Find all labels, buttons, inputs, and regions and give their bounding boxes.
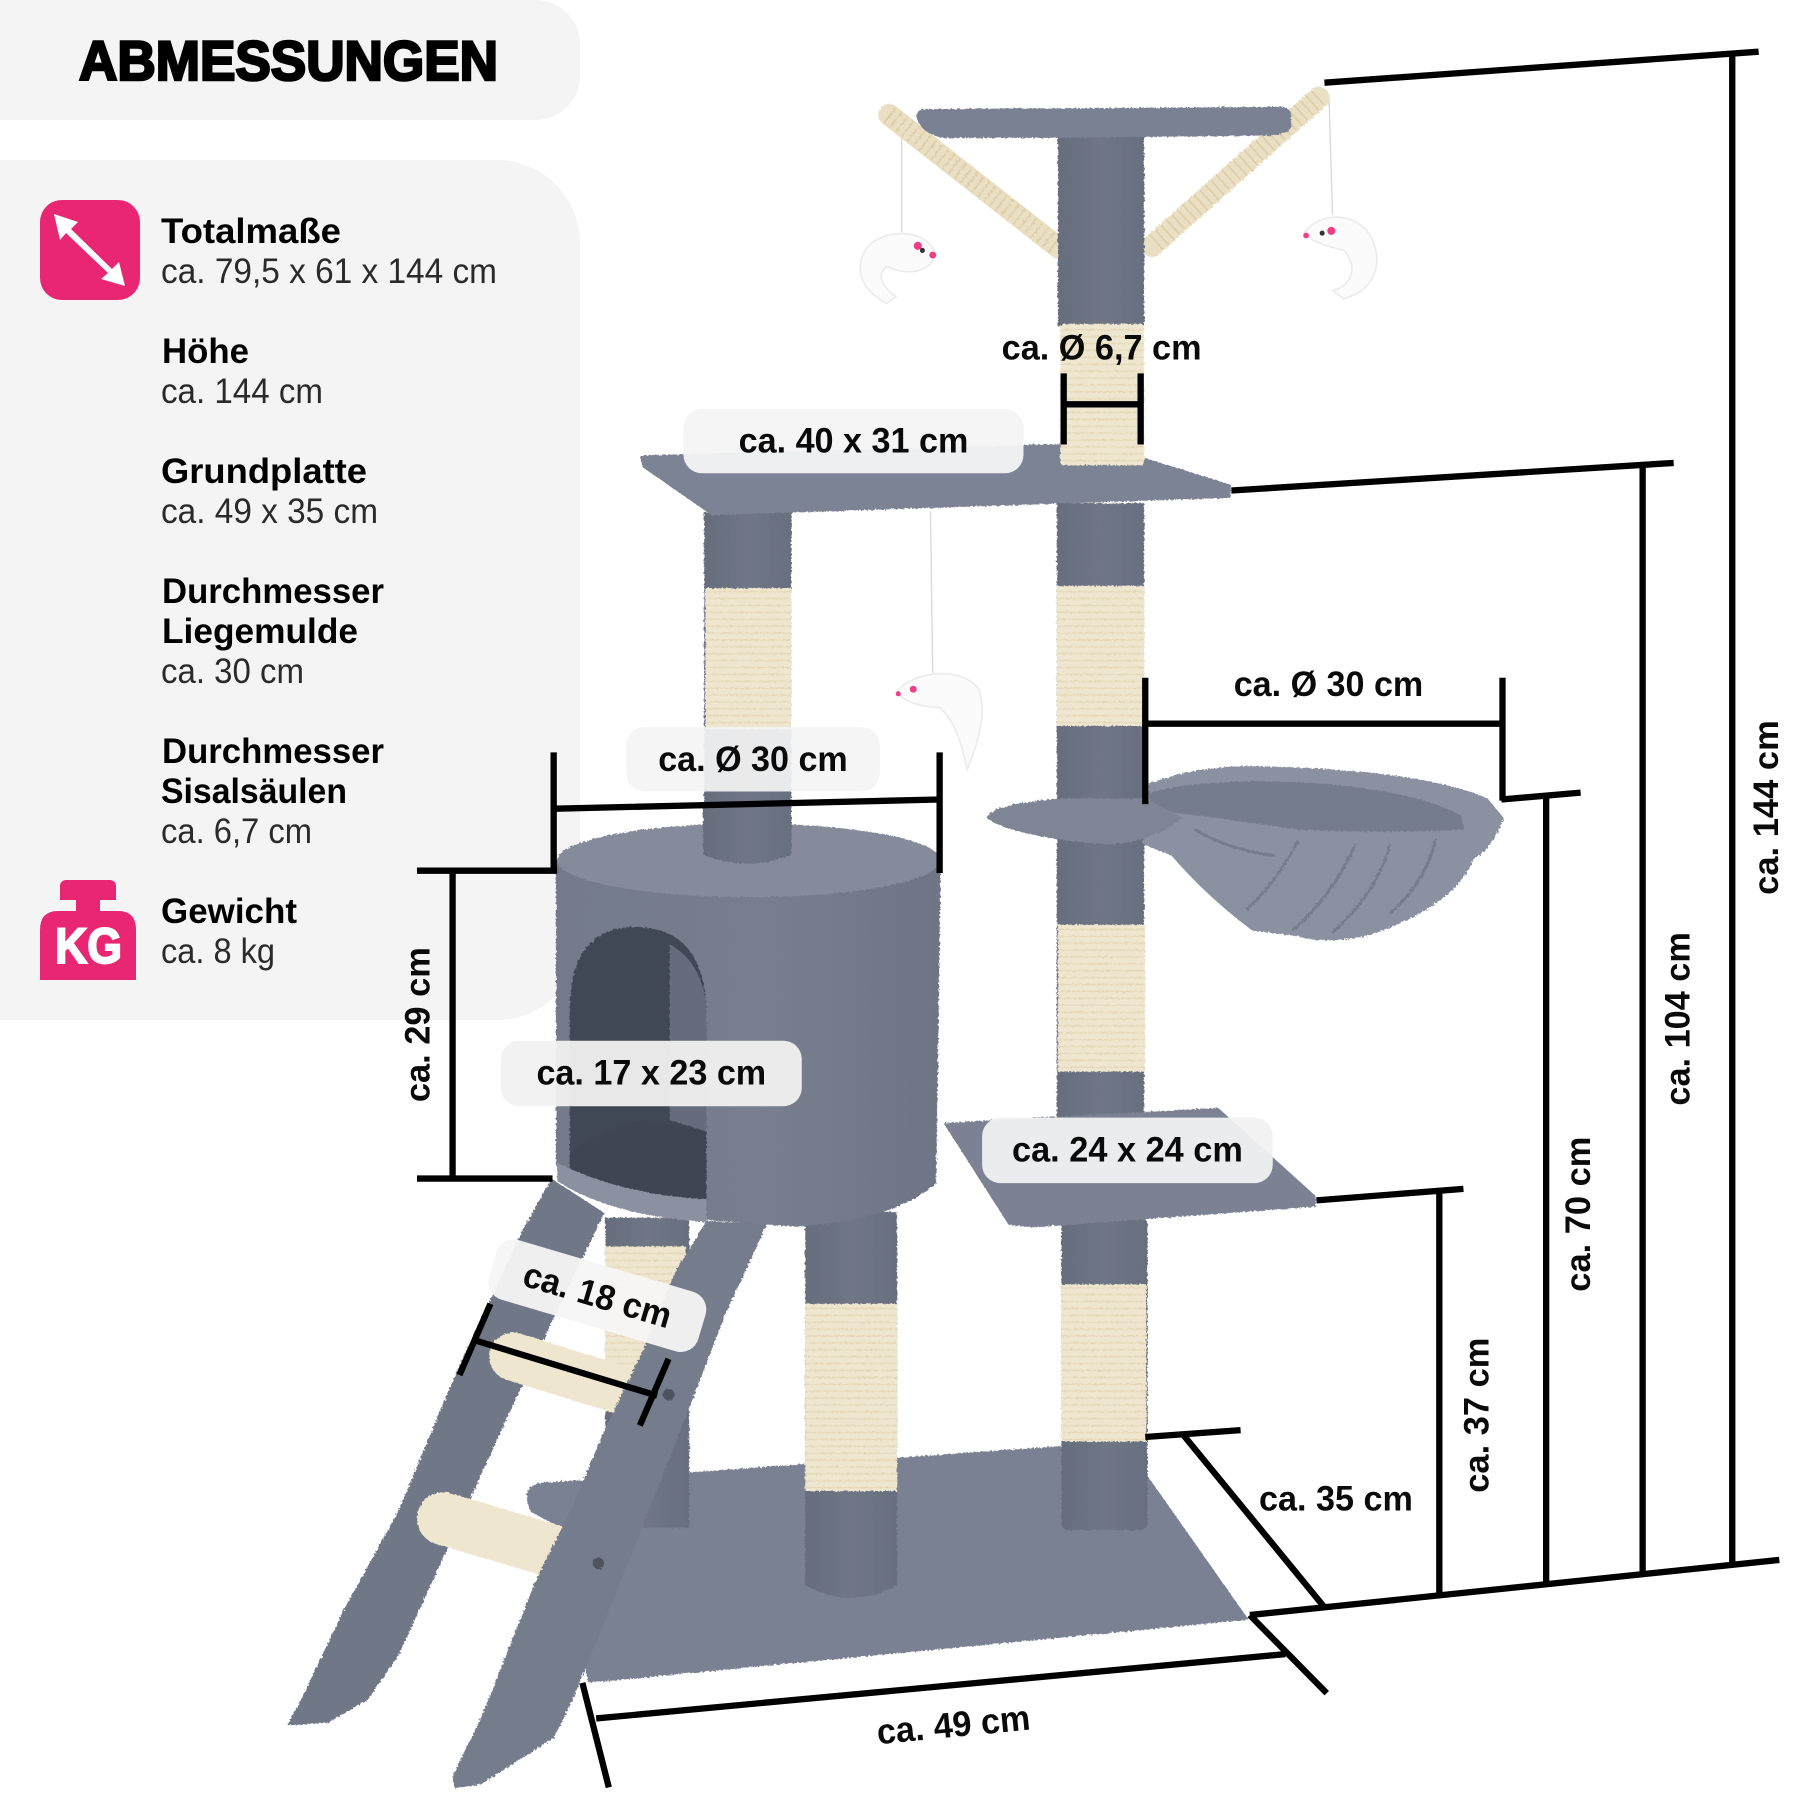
dimension: post diameter: ca. Ø 6,7 cm xyxy=(1002,328,1202,368)
label: house opening: ca. 17 x 23 cm xyxy=(536,1052,766,1092)
dimension: 70 cm: ca. 70 cm xyxy=(1558,1137,1598,1292)
spec: height: ca. 144 cm xyxy=(161,372,323,411)
ladder rear rail xyxy=(287,1179,604,1725)
dimension: house diameter: ca. Ø 30 cm xyxy=(658,739,848,779)
dimension: ladder width: ca. 18 cm xyxy=(519,1254,676,1336)
dimension: 70 cm xyxy=(1501,793,1598,1583)
icon: weight: KG xyxy=(55,918,122,974)
spec: hollow diameter xyxy=(161,572,384,691)
spec: weight: ca. 8 kg xyxy=(161,932,275,971)
toy mice xyxy=(860,217,1377,770)
hammock xyxy=(987,766,1504,940)
dimensions and labels xyxy=(398,52,1786,1787)
spec: total size: ca. 79,5 x 61 x 144 cm xyxy=(161,252,497,291)
spec: total size xyxy=(161,212,497,291)
arms xyxy=(889,98,1319,248)
lower platform xyxy=(947,1110,1314,1226)
dimension: hammock diameter xyxy=(1145,664,1502,804)
toy strings xyxy=(902,98,1332,673)
dimension: 104 cm: ca. 104 cm xyxy=(1658,932,1698,1106)
top platform xyxy=(917,107,1291,138)
spec: weight: Gewicht xyxy=(161,892,297,931)
dimension: house height xyxy=(398,871,557,1179)
dimension: house height: ca. 29 cm xyxy=(398,947,438,1102)
label: lower platform: ca. 24 x 24 cm xyxy=(1012,1129,1243,1169)
label: middle platform: ca. 40 x 31 cm xyxy=(739,421,968,461)
dimension: base width xyxy=(582,1615,1327,1787)
spec: sisal post diameter: Sisalsäulen xyxy=(161,772,347,811)
spec: sisal post diameter: Durchmesser xyxy=(162,732,384,771)
label: lower platform xyxy=(982,1118,1273,1183)
ladder rungs xyxy=(443,1357,620,1551)
dimension: total height xyxy=(1250,52,1786,1615)
dimension: ladder width xyxy=(459,1235,711,1426)
spec: hollow diameter: ca. 30 cm xyxy=(161,652,304,691)
front post xyxy=(805,1212,897,1598)
dimension: house diameter xyxy=(554,727,940,873)
panel: title xyxy=(0,0,580,120)
spec: height: Höhe xyxy=(162,332,249,371)
main post xyxy=(1057,503,1145,1123)
middle platform xyxy=(642,391,1229,513)
top post xyxy=(1058,136,1144,465)
spec: hollow diameter: Durchmesser xyxy=(162,572,384,611)
panel: specifications xyxy=(0,160,580,1020)
spec: sisal post diameter xyxy=(161,732,384,851)
ladder front rail xyxy=(453,1221,767,1789)
spec: base plate xyxy=(161,452,378,531)
dimension: 37 cm xyxy=(1316,1189,1497,1594)
label: middle platform xyxy=(683,409,1023,473)
base plate xyxy=(527,1442,1249,1683)
dimension: post diameter xyxy=(1002,328,1202,445)
dimension: base depth: ca. 35 cm xyxy=(1259,1479,1413,1519)
label: house opening xyxy=(501,1041,802,1106)
dimension: total height: ca. 144 cm xyxy=(1746,720,1786,895)
spec: hollow diameter: Liegemulde xyxy=(162,612,358,651)
icon: weight xyxy=(40,880,136,980)
spec: weight xyxy=(161,892,297,971)
spec: height xyxy=(161,332,323,411)
dimension: base width: ca. 49 cm xyxy=(875,1698,1032,1752)
spec: base plate: ca. 49 x 35 cm xyxy=(161,492,378,531)
screws xyxy=(593,1389,674,1569)
spec: base plate: Grundplatte xyxy=(161,452,367,491)
house xyxy=(556,804,941,1227)
dimension: 104 cm xyxy=(1231,463,1698,1574)
dimension: 37 cm: ca. 37 cm xyxy=(1457,1338,1497,1493)
spec: sisal post diameter: ca. 6,7 cm xyxy=(161,812,312,851)
spec: total size: Totalmaße xyxy=(161,212,341,251)
upper left post xyxy=(704,512,791,864)
heading: ABMESSUNGEN xyxy=(79,29,498,92)
rear left post xyxy=(605,1218,689,1528)
main post lower xyxy=(1061,1218,1148,1530)
dimension: hammock diameter: ca. Ø 30 cm xyxy=(1234,664,1423,704)
dimension: base depth xyxy=(1145,1430,1413,1606)
cat tree illustration xyxy=(287,98,1504,1789)
icon: diagonal dimensions arrow xyxy=(40,200,140,300)
